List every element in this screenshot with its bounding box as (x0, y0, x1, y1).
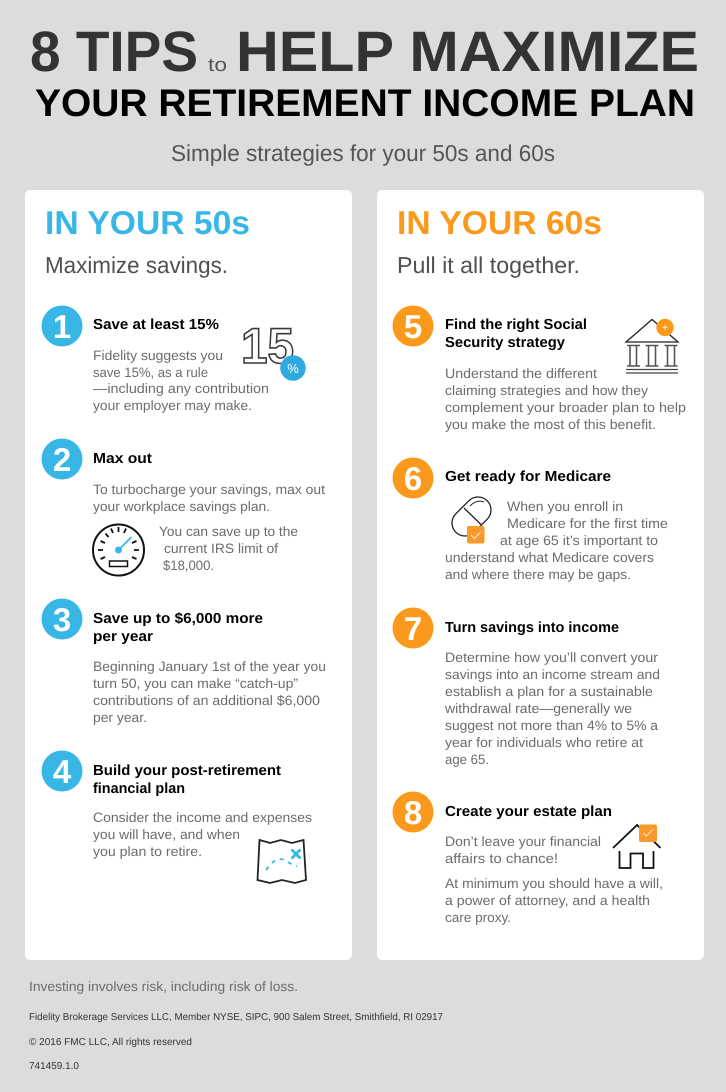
title (30, 20, 699, 125)
tip 5 (392, 306, 686, 432)
panel: in your 60s (377, 190, 704, 960)
subheading: maximize savings: Maximize savings. (45, 252, 228, 278)
speedometer caption: You can save up to the (159, 524, 298, 539)
tip 6 body: When you enroll in (507, 499, 623, 514)
tip 6 (392, 458, 668, 582)
tip 4 body: you will have, and when (93, 827, 240, 842)
heading: in your 60s: IN YOUR 60s (397, 204, 602, 241)
tip 8 body: affairs to chance! (445, 851, 558, 866)
tip 3 body: per year. (93, 710, 147, 725)
tip 7 (392, 608, 660, 767)
tip 4 title: Build your post-retirement (93, 763, 281, 779)
tip 1 body: —including any contribution (93, 381, 269, 396)
tip 2 (42, 438, 325, 576)
number 3 (42, 598, 82, 640)
tip 2 body: your workplace savings plan. (93, 499, 270, 514)
tip 5 title: Find the right Social (445, 317, 587, 333)
tip 7 body: savings into an income stream and (445, 667, 660, 682)
tip 1 (42, 306, 306, 413)
tip 1 body (93, 348, 269, 413)
tip 6 body (445, 499, 668, 582)
number 6: 6 (404, 460, 422, 497)
tip 3 body (93, 659, 326, 725)
tip 8 body: At minimum you should have a will, (445, 876, 663, 891)
number 4 (42, 750, 82, 792)
tip 4 body (93, 810, 312, 859)
title: 8 TIPS (30, 20, 198, 84)
icon: house with check (613, 824, 660, 868)
tip 4 body: Consider the income and expenses (93, 810, 312, 825)
panel: in your 50s (25, 190, 352, 960)
number 8: 8 (404, 794, 422, 831)
tip 8 body: a power of attorney, and a health (445, 893, 650, 908)
tip 4 (42, 750, 312, 883)
speedometer caption (159, 524, 298, 573)
tip 7 body: Determine how you’ll convert your (445, 650, 658, 665)
tip 7 body: withdrawal rate—generally we (444, 701, 632, 716)
tip 2 body (93, 482, 325, 514)
tip 3 body: contributions of an additional $6,000 (93, 693, 320, 708)
tip 6 body: at age 65 it’s important to (500, 533, 658, 548)
icon: 15 percent: 15 (241, 318, 294, 374)
tip 4 title (93, 763, 281, 797)
number 7 (392, 608, 434, 648)
tip 5 body (445, 366, 686, 432)
number 6 (392, 458, 434, 498)
icon: medicine capsule (447, 492, 496, 544)
speedometer caption: $18,000. (163, 558, 214, 573)
tip 3 title (93, 611, 263, 645)
tip 7 body (444, 650, 660, 767)
tip 8 (392, 792, 663, 925)
number 4: 4 (53, 753, 72, 790)
tip 1 title: Save at least 15% (93, 317, 219, 333)
icon: treasure map (258, 840, 306, 883)
tip 3 (42, 598, 326, 725)
tip 6 body: understand what Medicare covers (445, 550, 654, 565)
footer: legal text: 741459.1.0 (29, 1061, 79, 1072)
tip 8 title: Create your estate plan (445, 804, 612, 820)
tip 7 body: establish a plan for a sustainable (445, 684, 653, 699)
number 2: 2 (53, 441, 71, 478)
number 1 (42, 306, 82, 346)
title: YOUR RETIREMENT INCOME PLAN (35, 82, 695, 125)
tip 1 body: Fidelity suggests you (93, 348, 223, 363)
icon: 15 percent: % (287, 361, 299, 376)
number 7: 7 (404, 610, 422, 647)
tip 7 body: age 65. (445, 752, 489, 767)
tip 2 title: Max out (93, 451, 152, 467)
tip 7 title: Turn savings into income (445, 620, 619, 636)
tip 5 body: claiming strategies and how they (445, 383, 648, 398)
footer: legal text: © 2016 FMC LLC, All rights reserved (29, 1037, 192, 1048)
icon: bank building (626, 319, 678, 373)
footer: risk statement: Investing involves risk, including risk of loss. (29, 979, 298, 994)
tip 4 body: you plan to retire. (93, 844, 202, 859)
tip 8 body (445, 834, 663, 925)
tip 3 title: per year (93, 629, 153, 645)
tip 5 body: you make the most of this benefit. (445, 417, 656, 432)
tip 5 title: Security strategy (445, 335, 566, 351)
tip 6 body: Medicare for the first time (507, 516, 668, 531)
number 8 (392, 792, 434, 832)
footer: legal text: Fidelity Brokerage Services LLC, Member NYSE, SIPC, 900 Salem Street, Smithfield, RI 02917 (29, 1012, 443, 1023)
subheading: pull it all together: Pull it all together. (397, 252, 580, 278)
tip 1 body: save 15%, as a rule (93, 365, 208, 380)
number 3: 3 (53, 601, 71, 638)
tip 3 body: turn 50, you can make “catch-up” (93, 676, 298, 691)
subtitle: Simple strategies for your 50s and 60s (171, 140, 555, 166)
footer: legal text (29, 1012, 443, 1072)
number 2 (42, 438, 82, 480)
tip 6 body: and where there may be gaps. (445, 567, 631, 582)
tip 5 body: Understand the different (445, 366, 597, 381)
tip 5 body: complement your broader plan to help (445, 400, 686, 415)
tip 7 body: suggest not more than 4% to 5% a (445, 718, 658, 733)
number 1: 1 (53, 308, 71, 345)
tip 8 body: care proxy. (445, 910, 511, 925)
tip 8 body: Don’t leave your financial (445, 834, 601, 849)
tip 4 title: financial plan (93, 781, 185, 797)
speedometer caption: current IRS limit of (164, 541, 278, 556)
tip 5 title (445, 317, 587, 351)
title: to (208, 55, 227, 76)
tip 7 body: year for individuals who retire at (445, 735, 643, 750)
icon: speedometer (93, 524, 144, 576)
number 5 (392, 306, 434, 346)
tip 3 title: Save up to $6,000 more (93, 611, 263, 627)
heading: in your 50s: IN YOUR 50s (45, 204, 250, 241)
tip 2 body: To turbocharge your savings, max out (93, 482, 325, 497)
title: HELP MAXIMIZE (236, 20, 699, 84)
number 5: 5 (404, 308, 422, 345)
tip 3 body: Beginning January 1st of the year you (93, 659, 326, 674)
tip 1 body: your employer may make. (93, 398, 252, 413)
tip 6 title: Get ready for Medicare (445, 469, 611, 485)
